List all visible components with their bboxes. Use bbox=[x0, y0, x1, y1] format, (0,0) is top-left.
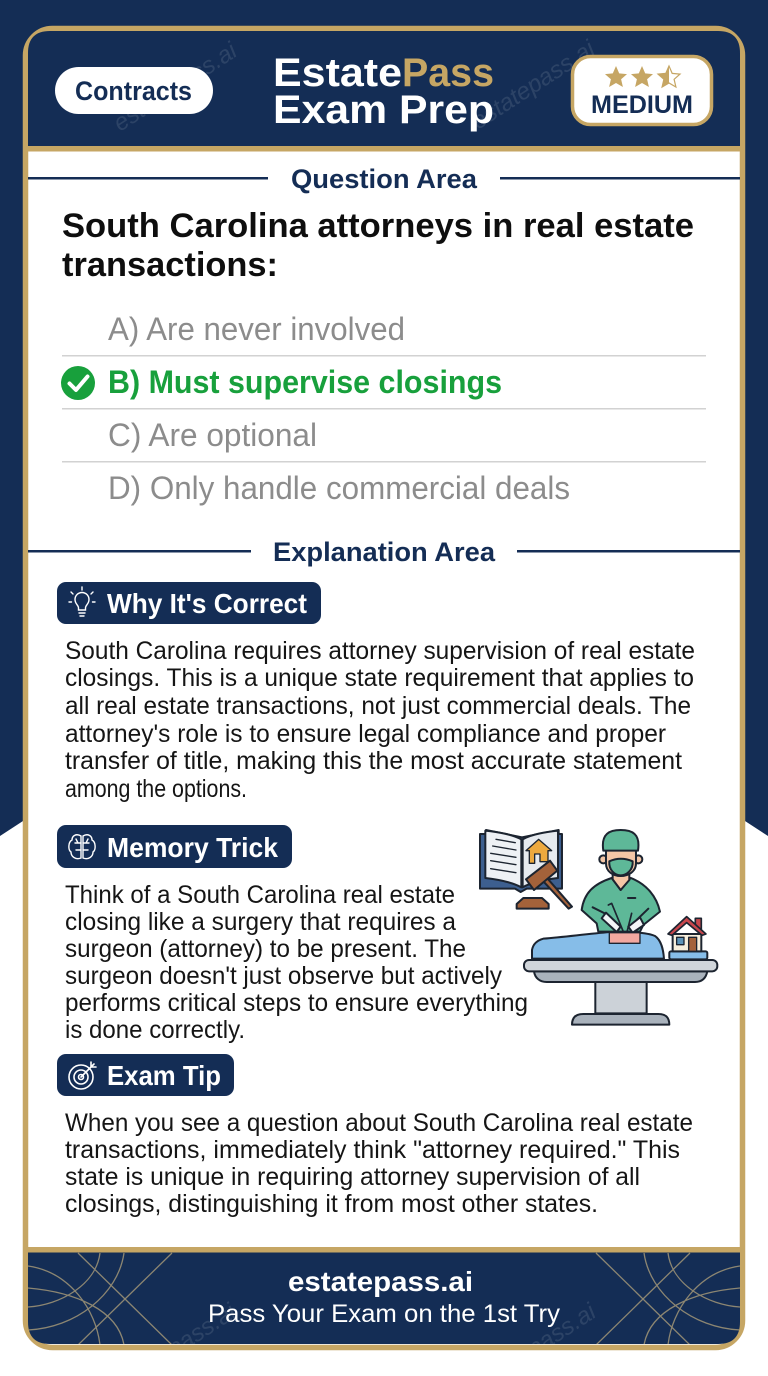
memory trick text: surgeon (attorney) to be present. The bbox=[65, 935, 466, 963]
memory trick text: performs critical steps to ensure everything bbox=[65, 989, 528, 1017]
icon: small house bbox=[668, 917, 707, 959]
why it's correct chip: Why It's Correct bbox=[107, 588, 307, 619]
surgeon bbox=[582, 830, 660, 933]
difficulty badge: MEDIUM bbox=[591, 91, 693, 119]
exam tip text: closings, distinguishing it from most other states. bbox=[65, 1190, 598, 1218]
star rating bbox=[605, 66, 680, 87]
option D: D) Only handle commercial deals bbox=[108, 470, 570, 506]
exam tip text: transactions, immediately think "attorney required." This bbox=[65, 1136, 680, 1164]
memory trick chip bbox=[57, 825, 292, 868]
patient on table bbox=[524, 932, 717, 1025]
category pill bbox=[55, 67, 213, 114]
why it's correct text: South Carolina requires attorney supervision of real estate bbox=[65, 637, 695, 665]
why it's correct text: transfer of title, making this the most accurate statement bbox=[65, 747, 682, 775]
question text: South Carolina attorneys in real estate bbox=[62, 207, 694, 245]
website name: estatepass.ai bbox=[288, 1266, 473, 1297]
why it's correct text bbox=[65, 637, 695, 803]
brand title: Exam Prep bbox=[273, 88, 494, 132]
question area heading: Question Area bbox=[291, 164, 478, 194]
exam tip text bbox=[65, 1109, 693, 1218]
brand title: Pass bbox=[402, 51, 494, 95]
header band bbox=[28, 31, 740, 152]
memory trick text bbox=[65, 881, 528, 1044]
option B correct: B) Must supervise closings bbox=[108, 364, 502, 400]
brand title bbox=[273, 51, 494, 132]
question text bbox=[62, 207, 694, 284]
memory trick chip: Memory Trick bbox=[107, 832, 278, 863]
why it's correct text: all real estate transactions, not just commercial deals. The bbox=[65, 692, 691, 720]
memory trick text: is done correctly. bbox=[65, 1016, 245, 1044]
exam tip chip bbox=[57, 1054, 234, 1096]
illustration: surgeon attorney bbox=[480, 830, 717, 1025]
explanation area heading: Explanation Area bbox=[273, 537, 496, 567]
why it's correct text: attorney's role is to ensure legal compliance and proper bbox=[65, 720, 666, 748]
icon: brain bbox=[69, 835, 95, 859]
memory trick text: Think of a South Carolina real estate bbox=[65, 881, 455, 909]
brand title: Estate bbox=[273, 51, 402, 95]
footer band bbox=[28, 1247, 740, 1344]
answer options bbox=[61, 311, 706, 506]
memory trick text: surgeon doesn't just observe but actively bbox=[65, 962, 502, 990]
why it's correct chip bbox=[57, 582, 321, 624]
why it's correct text: among the options. bbox=[65, 775, 247, 803]
exam tip text: state is unique in requiring attorney supervision of all bbox=[65, 1163, 640, 1191]
memory trick text: closing like a surgery that requires a bbox=[65, 908, 456, 936]
option C: C) Are optional bbox=[108, 417, 317, 453]
icon: target bbox=[69, 1062, 96, 1089]
watermarks bbox=[109, 35, 600, 137]
icon: light bulb bbox=[69, 587, 95, 616]
watermarks bbox=[172, 1301, 595, 1344]
exam tip chip: Exam Tip bbox=[107, 1060, 221, 1091]
question text: transactions: bbox=[62, 246, 278, 284]
watermarks: estatepass.ai bbox=[109, 37, 242, 137]
icon: correct check bbox=[61, 366, 95, 400]
icon: law book and gavel bbox=[480, 830, 572, 909]
footer ornament bbox=[28, 1253, 740, 1345]
exam tip text: When you see a question about South Carolina real estate bbox=[65, 1109, 693, 1137]
why it's correct text: closings. This is a unique state requirement that applies to bbox=[65, 664, 694, 692]
tagline: Pass Your Exam on the 1st Try bbox=[208, 1300, 561, 1328]
option A: A) Are never involved bbox=[108, 311, 405, 347]
category pill: Contracts bbox=[75, 76, 192, 106]
watermarks: estatepass.ai bbox=[467, 35, 600, 135]
difficulty badge bbox=[572, 56, 712, 124]
